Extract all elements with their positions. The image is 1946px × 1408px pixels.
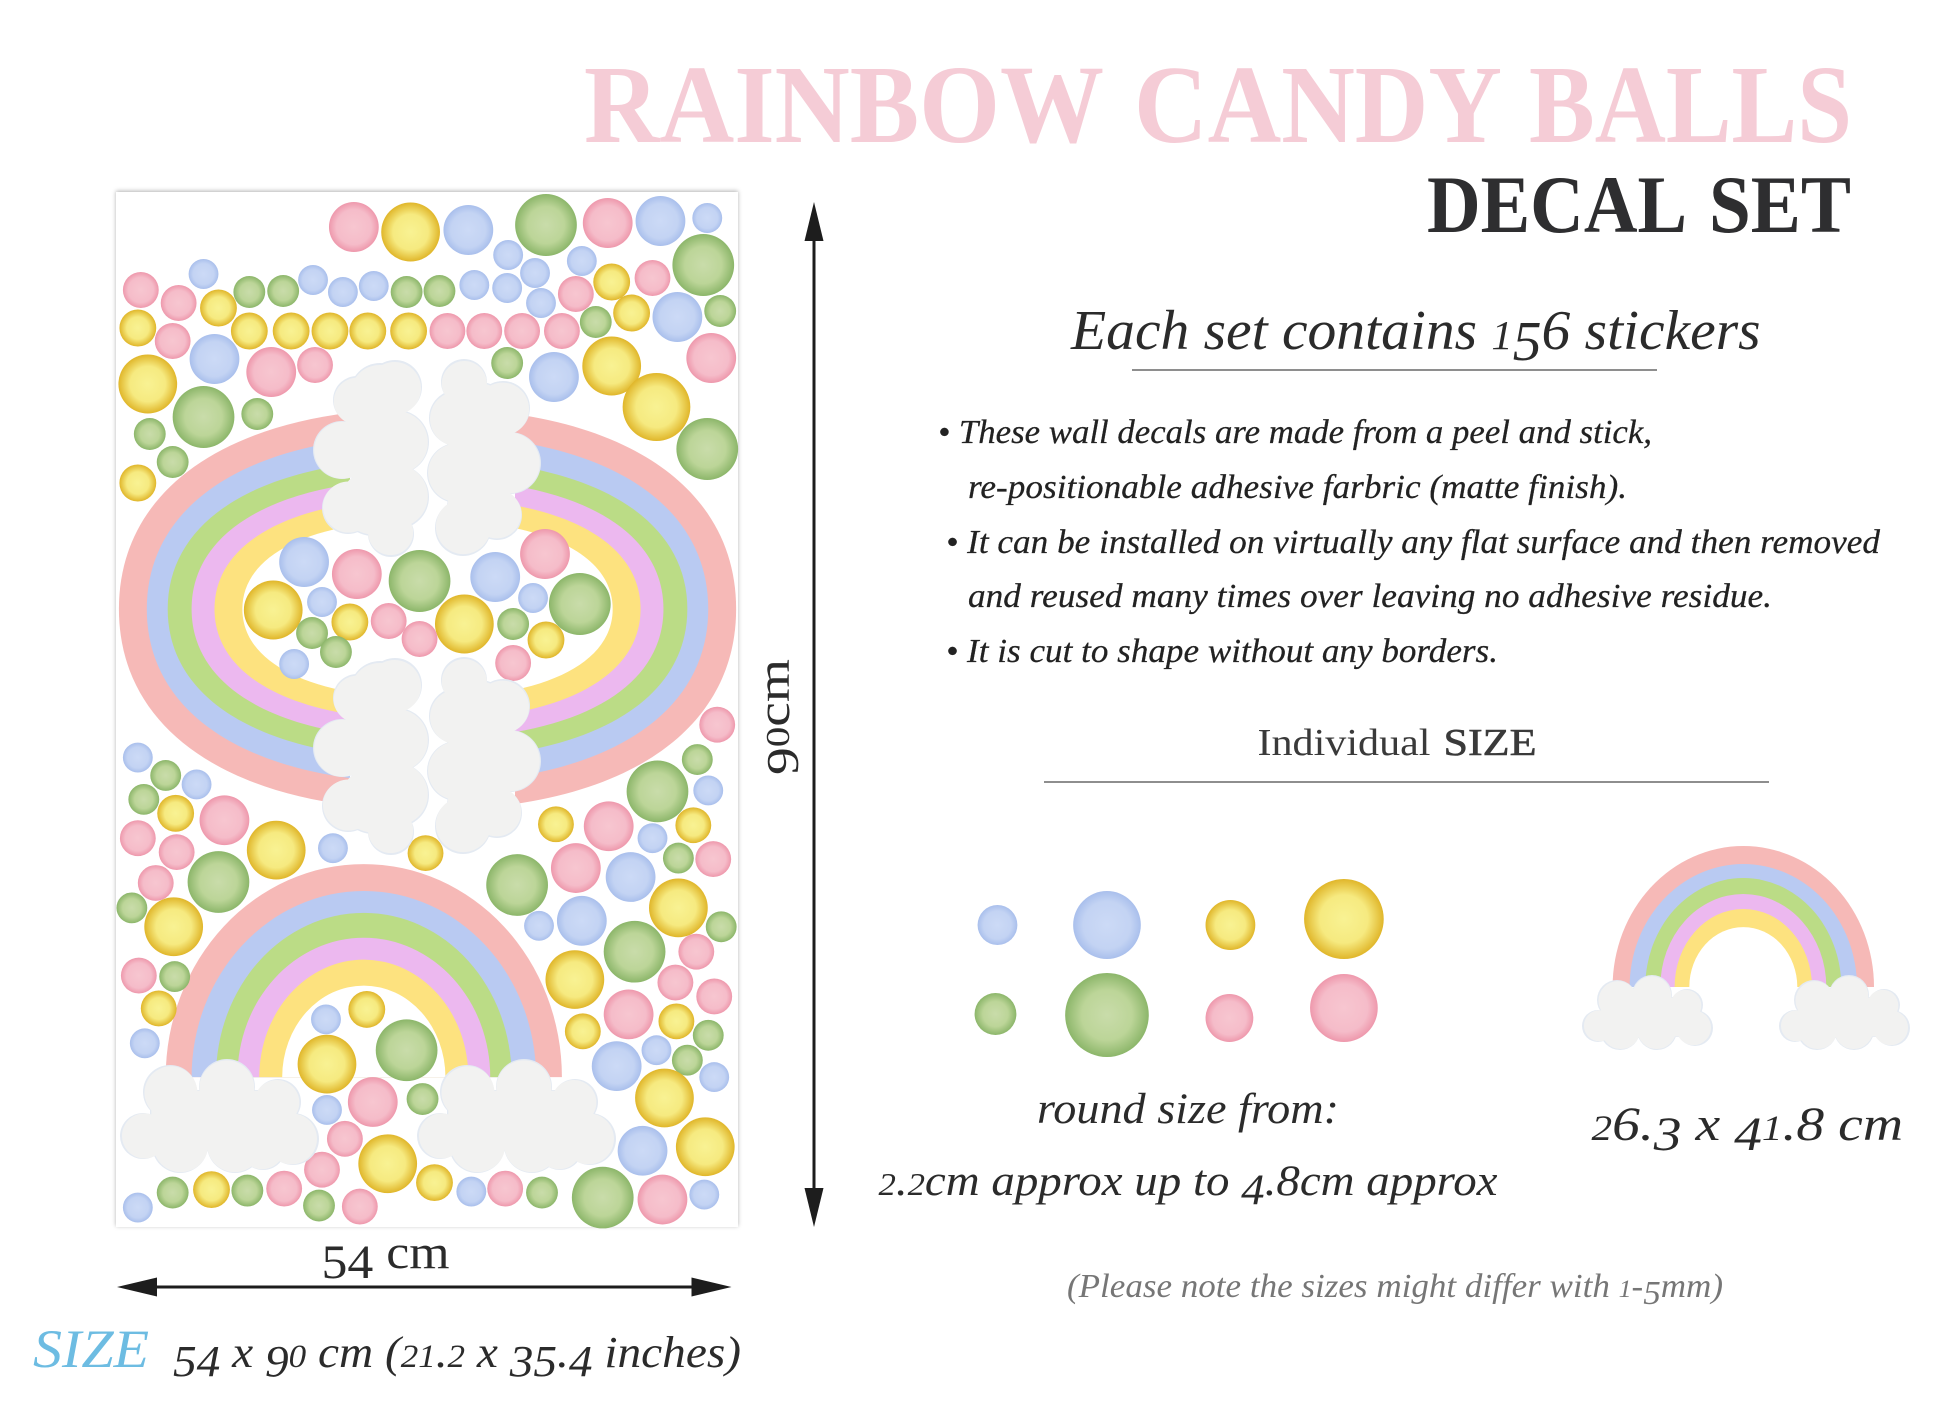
- arrow: width dimension: [117, 1278, 732, 1296]
- feature list: • It is cut to shape without any borders.: [946, 633, 1498, 670]
- sample round balls: [975, 879, 1384, 1057]
- round size caption: 2.2cm approx up to 4.8cm approx: [878, 1158, 1498, 1214]
- arrow: height dimension: [804, 202, 824, 1227]
- label: 90cm: 90cm: [748, 659, 808, 775]
- panel: decal sheet: [116, 192, 738, 1228]
- oval rainbow: [119, 408, 736, 810]
- heading: individual size: Individual: [1258, 722, 1430, 764]
- heading: individual size: SIZE: [1444, 722, 1536, 764]
- heading: individual size: [1258, 722, 1536, 764]
- subtitle: DECAL: [1427, 159, 1687, 250]
- round size caption: round size from:: [1037, 1086, 1339, 1133]
- feature list: and reused many times over leaving no adhesive residue.: [968, 578, 1772, 615]
- feature list: re-positionable adhesive farbric (matte finish).: [968, 469, 1627, 506]
- round size caption: [878, 1086, 1498, 1214]
- upper candy balls: [118, 194, 738, 502]
- feature list: • These wall decals are made from a peel and stick,: [938, 414, 1652, 451]
- heading underline: [1132, 369, 1657, 371]
- label: 54 cm: 54 cm: [322, 1226, 450, 1289]
- subtitle: [1427, 159, 1851, 250]
- rainbow size caption: 26.3 x 41.8 cm: [1592, 1098, 1903, 1161]
- feature list: • It can be installed on virtually any flat surface and then removed: [946, 524, 1881, 561]
- lower rainbow: [166, 864, 562, 1077]
- clouds on oval rainbow: [313, 359, 541, 855]
- sample rainbow with clouds: [1582, 846, 1910, 1050]
- candy balls inside oval rainbow: [244, 529, 611, 681]
- title: RAINBOW: [584, 44, 1104, 167]
- feature list: [938, 414, 1881, 670]
- size heading underline: [1044, 781, 1769, 783]
- clouds on lower rainbow: [120, 1059, 616, 1173]
- title: CANDY: [1134, 44, 1502, 167]
- overall size text: 54 x 90 cm (21.2 x 35.4 inches): [173, 1328, 741, 1386]
- size label: SIZE: [33, 1319, 149, 1379]
- title: [584, 44, 1852, 167]
- heading: sticker count: Each set contains 156 stickers: [1070, 300, 1760, 373]
- title: BALLS: [1529, 44, 1852, 167]
- tolerance note: (Please note the sizes might differ with 1-5mm): [1067, 1268, 1723, 1312]
- lower candy balls: [116, 707, 737, 1228]
- subtitle: SET: [1709, 159, 1851, 250]
